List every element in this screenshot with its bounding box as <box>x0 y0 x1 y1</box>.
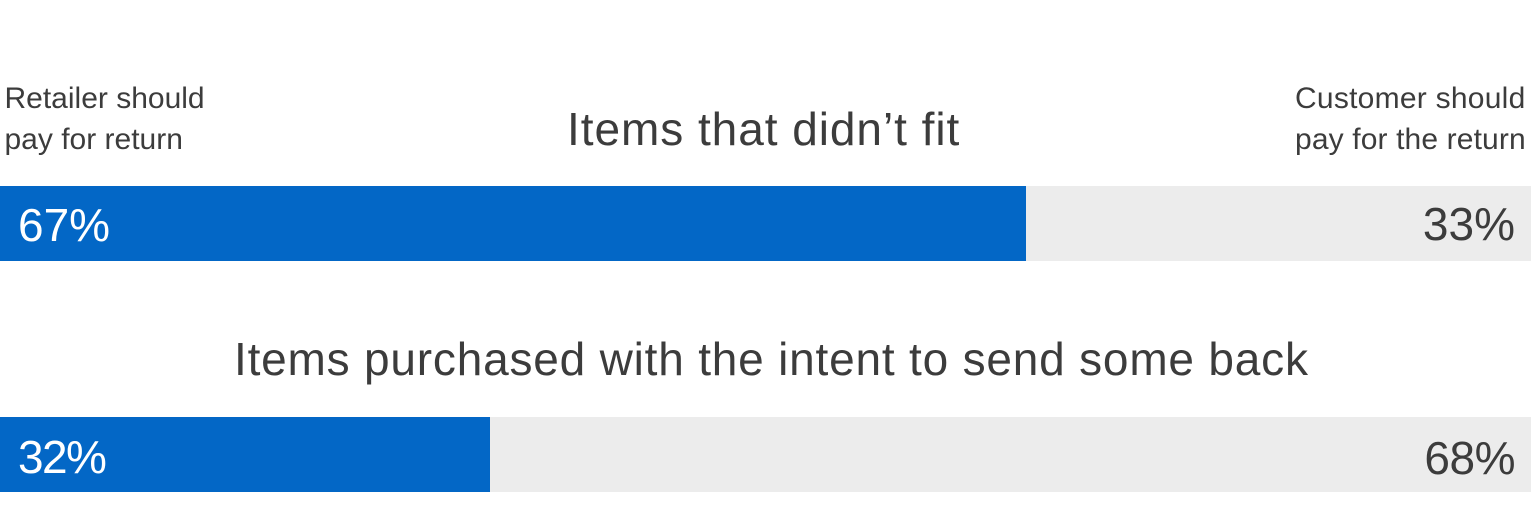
value: 33%: 33% <box>1423 198 1515 250</box>
retailer share bar 67% <box>0 186 1026 261</box>
right legend label: Customer should <box>1295 82 1526 115</box>
left legend label: pay for return <box>4 123 183 156</box>
heading: items purchased with intent: Items purchased with the intent to send some back <box>234 333 1309 385</box>
value: 68%: 68% <box>1424 432 1515 484</box>
left legend label <box>4 82 205 156</box>
retailer share bar 32% <box>0 417 490 492</box>
heading: items that didn't fit: Items that didn’t fit <box>567 103 960 155</box>
bar: items purchased with intent <box>0 417 1531 492</box>
value: 32%: 32% <box>18 431 105 483</box>
bar: items that didn't fit <box>0 186 1531 261</box>
value: 67%: 67% <box>18 199 110 251</box>
left legend label: Retailer should <box>4 82 205 115</box>
right legend label <box>1295 82 1526 156</box>
right legend label: pay for the return <box>1295 123 1526 156</box>
